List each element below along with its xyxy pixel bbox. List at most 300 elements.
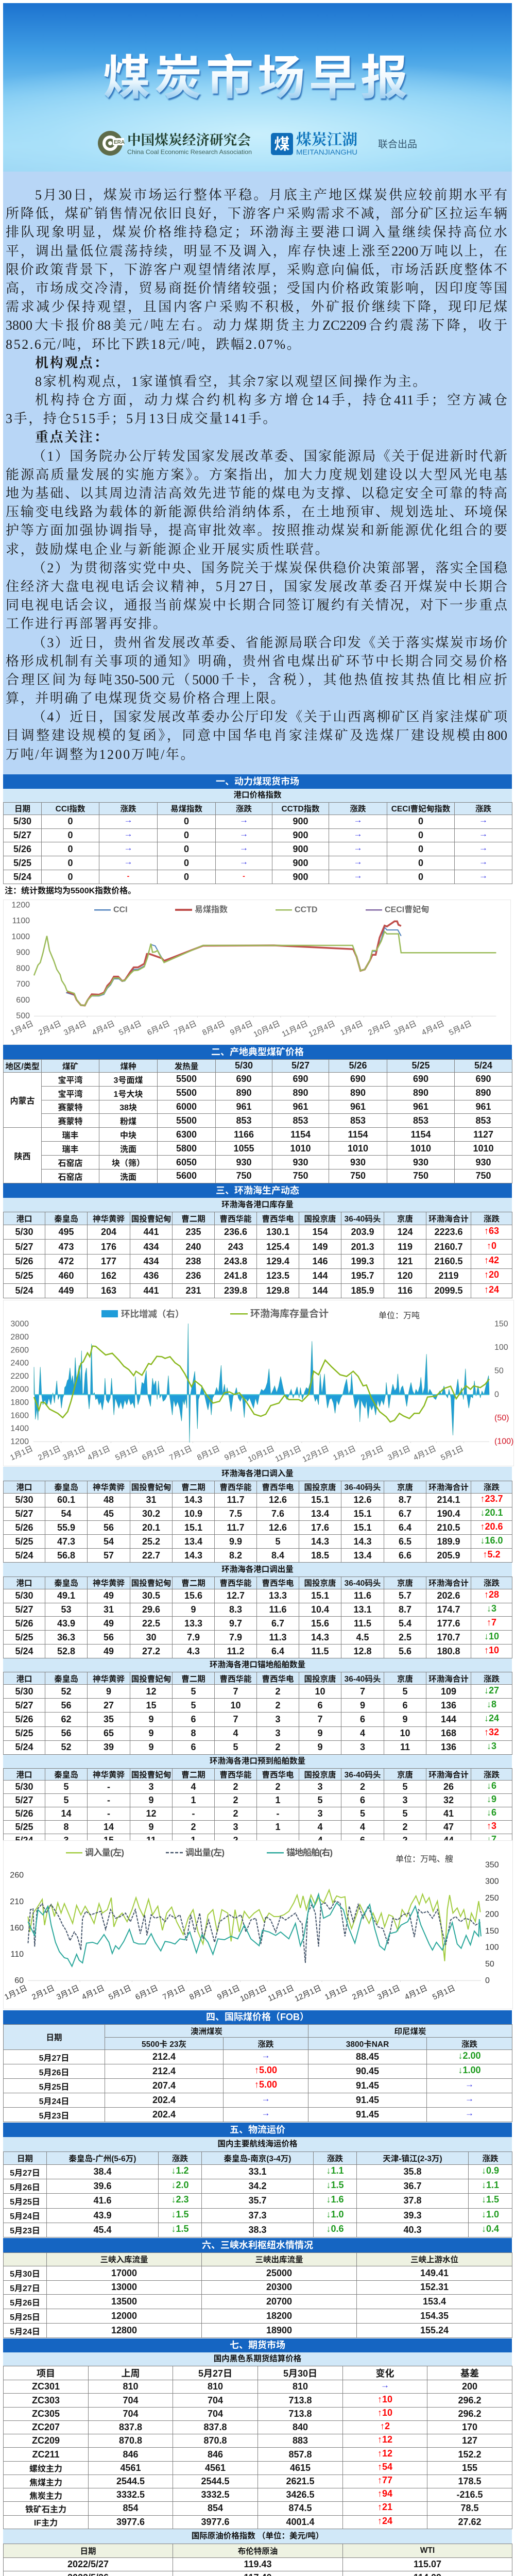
table: port inventory: 163 <box>101 1285 116 1296</box>
y axis labels: 1200 <box>11 901 30 910</box>
x axis labels: 3月4日 <box>62 1019 88 1037</box>
table: anchored ships: 136 <box>441 1742 456 1752</box>
table heading: 国内黑色系期货结算价格 <box>214 2354 301 2363</box>
table: anchored ships: ↓27 <box>484 1685 499 1696</box>
commentary text: 机构持仓方面，动力煤合约机构多方增仓14手，持仓411手；空方减仓 <box>35 393 507 408</box>
table: port price indices: 涨跌 <box>350 805 366 814</box>
table: port inventory: 120 <box>397 1270 413 1281</box>
table: FOB prices: 5月26日 <box>39 2069 69 2077</box>
table: port outflow: 环渤海合计 <box>428 1579 469 1588</box>
panel: section 5 logistics freight <box>3 2123 512 2238</box>
table: port outflow: 涨跌 <box>484 1579 500 1588</box>
table: port outflow: 神华黄骅 <box>93 1579 125 1588</box>
table: port inflow: 54 <box>104 1536 114 1547</box>
left y axis: 1200 <box>10 1437 29 1446</box>
table: port price indices: 900 <box>293 844 308 854</box>
table: expected ships: 1 <box>191 1835 196 1845</box>
legend <box>66 1848 333 1858</box>
left y axis: 160 <box>10 1924 24 1933</box>
right y axis: 50 <box>494 1366 504 1376</box>
table: anchored ships: 39 <box>104 1742 114 1752</box>
left y axis: 1600 <box>10 1411 29 1420</box>
table: port inflow: 47.3 <box>57 1536 75 1547</box>
table: port inflow: 6.7 <box>399 1509 411 1519</box>
y axis labels <box>11 901 30 1020</box>
table: anchored ships: 7 <box>360 1686 365 1697</box>
table: FOB prices: → <box>262 2094 270 2104</box>
table: expected ships: 5/30 <box>15 1782 33 1792</box>
table: port inflow: 9.9 <box>229 1536 242 1547</box>
table: sea freight: 36.7 <box>403 2181 422 2191</box>
section heading <box>3 2238 512 2252</box>
table: port inventory: ↑63 <box>484 1226 499 1236</box>
table: futures settlement: IF主力 <box>34 2519 58 2528</box>
table: FOB prices: 5月27日 <box>39 2054 69 2063</box>
table: port price indices: → <box>479 843 488 853</box>
table: port price indices: 0 <box>184 816 189 826</box>
table: expected ships: ↓6 <box>487 1781 496 1791</box>
table: port inflow: 曹西华能 <box>219 1483 251 1492</box>
x axis labels: 2月4日 <box>37 1019 63 1037</box>
table: port inflow: ↓16.0 <box>480 1535 503 1546</box>
table heading <box>3 1755 512 1768</box>
table: Three Gorges flow and level: 152.31 <box>420 2282 449 2292</box>
left y axis: 2400 <box>10 1359 29 1368</box>
table: anchored ships: 6 <box>360 1714 365 1724</box>
table: crude oil prices: 日期 <box>80 2547 96 2556</box>
table heading: 环渤海各港口预到船舶数量 <box>210 1757 305 1766</box>
x axis labels: 12月1日 <box>301 1444 331 1464</box>
table: anchored ships: 2 <box>275 1742 280 1752</box>
table: expected ships: 2 <box>360 1782 365 1792</box>
table: port inventory: 449 <box>58 1285 74 1296</box>
table: Three Gorges flow and level: 5月25日 <box>10 2313 40 2322</box>
table: mine prices: 陕西 <box>14 1153 31 1161</box>
table: expected ships: 8 <box>63 1822 69 1832</box>
x axis labels: 12月4日 <box>307 1019 337 1039</box>
table: port price indices: 0 <box>67 872 73 882</box>
table: futures settlement: 基差 <box>460 2368 479 2379</box>
table: futures settlement: 857.8 <box>288 2449 312 2460</box>
table: sea freight: 45.4 <box>93 2225 112 2235</box>
table: port inflow: 5/25 <box>15 1536 33 1547</box>
table: expected ships: 港口 <box>16 1771 32 1780</box>
table: expected ships: 3 <box>63 1835 69 1845</box>
table: port outflow: 202.6 <box>437 1590 460 1601</box>
section heading: 一、动力煤现货市场 <box>216 776 299 787</box>
table: Three Gorges flow and level: 20300 <box>266 2282 292 2292</box>
y axis labels: 1000 <box>11 933 30 941</box>
table: port price indices: 0 <box>418 830 423 840</box>
table: anchored ships: 港口 <box>16 1675 32 1684</box>
unit label: 单位：万吨、艘 <box>396 1855 453 1864</box>
table: port price indices: → <box>239 843 248 853</box>
table: port outflow: 43.9 <box>57 1618 75 1629</box>
section heading: 七、期货市场 <box>230 2340 285 2350</box>
x axis labels: 8月1日 <box>188 1984 214 2002</box>
table: port price indices: → <box>239 829 248 839</box>
table: anchored ships: 3 <box>360 1742 365 1752</box>
table: port outflow: 12.8 <box>353 1646 372 1656</box>
table: mine prices: 853 <box>293 1115 308 1126</box>
table: port inflow: 36-40码头 <box>345 1483 381 1492</box>
table: expected ships: ↓7 <box>487 1834 496 1844</box>
panel: section 3 Bohai rim production <box>3 1183 514 2009</box>
table: port inflow: 5 <box>275 1536 280 1547</box>
table: sea freight: ↓1.5 <box>171 2224 189 2234</box>
table: mine prices: 宝平湾 <box>58 1090 82 1099</box>
x axis labels: 9月4日 <box>229 1019 254 1037</box>
table: port outflow: 49 <box>104 1646 114 1656</box>
table: anchored ships: 168 <box>441 1728 456 1738</box>
table: futures settlement: 4561 <box>205 2463 226 2473</box>
table: port outflow: 5.4 <box>399 1618 411 1629</box>
table: port inflow: ↑20.6 <box>480 1521 503 1532</box>
table: anchored ships: 136 <box>441 1700 456 1710</box>
x axis labels: 3月1日 <box>386 1444 412 1462</box>
table: port outflow: 27.2 <box>142 1646 160 1656</box>
table: FOB prices: 91.45 <box>356 2080 379 2091</box>
table: FOB prices: 207.4 <box>152 2080 176 2091</box>
table: mine prices: 1154 <box>290 1129 311 1140</box>
table: FOB prices: ↑5.00 <box>254 2065 277 2075</box>
table: port price indices: → <box>479 857 488 867</box>
panel: section 1 thermal coal spot market <box>3 774 512 1045</box>
table: port inflow: 56.8 <box>57 1550 75 1561</box>
table: port inventory: 144 <box>312 1270 328 1281</box>
x axis labels: 4月1日 <box>80 1984 106 2002</box>
table: mine prices: 750 <box>293 1171 308 1181</box>
table: port inventory: 199.3 <box>351 1256 374 1266</box>
table: port inflow: 6.4 <box>399 1522 411 1533</box>
table: expected ships: 47 <box>443 1822 454 1832</box>
table: port inventory: 434 <box>143 1256 159 1266</box>
table: port inflow: 港口 <box>16 1483 32 1492</box>
table: anchored ships: 涨跌 <box>484 1675 500 1684</box>
table: futures settlement: 变化 <box>376 2368 394 2379</box>
table: anchored ships: 9 <box>317 1728 322 1738</box>
table: port outflow: 53 <box>61 1604 72 1615</box>
table: mine prices: 38块 <box>119 1104 137 1112</box>
table: port outflow: 36-40码头 <box>345 1579 381 1588</box>
table: port inflow: 8.4 <box>271 1550 284 1561</box>
table: port outflow: 5/30 <box>15 1590 33 1601</box>
table: mine prices: 煤矿 <box>62 1062 78 1071</box>
legend: 调入量(左) <box>85 1848 124 1858</box>
table: port outflow: 4.5 <box>356 1632 369 1642</box>
table: port inventory: 国投京唐 <box>304 1215 336 1224</box>
table: port inventory: 204 <box>101 1227 116 1237</box>
table: Three Gorges flow and level: 5月30日 <box>10 2270 40 2279</box>
table: port outflow: 港口 <box>16 1579 32 1588</box>
x axis labels: 7月1日 <box>168 1444 194 1462</box>
table heading: 国内主要航线海运价格 <box>217 2140 298 2148</box>
commentary text: 住经济大盘电视电话会议精神，5月27日，国家发展改革委召开煤炭中长期合 <box>6 579 507 594</box>
table: futures settlement: ↑54 <box>377 2462 392 2472</box>
table: sea freight: 37.3 <box>248 2210 267 2221</box>
table: expected ships: 环渤海合计 <box>428 1771 469 1780</box>
table: futures settlement: 127 <box>462 2435 477 2446</box>
x axis labels <box>3 1984 457 2004</box>
table: futures settlement: 2544.5 <box>116 2476 145 2486</box>
right y axis: 300 <box>485 1877 499 1886</box>
legend: 易煤指数 <box>195 905 228 914</box>
table: port price indices: → <box>124 829 133 839</box>
table: anchored ships: 5/30 <box>15 1686 33 1697</box>
table: port inflow: 曹西华电 <box>262 1483 294 1492</box>
table: port inflow: 11.7 <box>227 1495 245 1505</box>
table: port inventory: 144 <box>312 1285 328 1296</box>
table: anchored ships: 5/25 <box>15 1728 33 1738</box>
table: expected ships: 1 <box>275 1795 280 1805</box>
x axis labels: 1月1日 <box>9 1444 35 1462</box>
table: port inflow: 15.1 <box>311 1495 329 1505</box>
table: mine prices: 5500 <box>176 1088 197 1098</box>
left y axis: 3000 <box>10 1320 29 1328</box>
x axis labels: 8月1日 <box>196 1444 221 1462</box>
table: expected ships: 15 <box>104 1835 114 1845</box>
table: mine prices: 690 <box>293 1074 308 1084</box>
table: futures settlement: ↑10 <box>377 2394 392 2404</box>
table: mine prices: 853 <box>236 1115 252 1126</box>
table: port outflow: 9.7 <box>229 1618 242 1629</box>
table: anchored ships: 6 <box>191 1714 196 1724</box>
table: mine prices: 5/26 <box>349 1060 367 1071</box>
table: sea freight: 35.8 <box>403 2166 422 2177</box>
table heading <box>3 2137 512 2151</box>
table: futures settlement: ZC301 <box>32 2381 60 2392</box>
y axis labels: 900 <box>16 948 30 957</box>
x axis labels: 5月4日 <box>117 1019 143 1037</box>
table: expected ships: 32 <box>443 1795 454 1805</box>
commentary text: （2）为贯彻落实党中央、国务院关于煤炭保供稳价决策部署，落实全国稳 <box>32 561 507 575</box>
table: expected ships: 2 <box>233 1808 238 1819</box>
y axis labels: 500 <box>16 1012 30 1020</box>
table: port price indices: 0 <box>418 872 423 882</box>
table: anchored ships: 环渤海合计 <box>428 1675 469 1684</box>
title: 煤炭市场早报 <box>103 40 412 108</box>
table: port inventory: 495 <box>58 1227 74 1237</box>
table: port inventory: 441 <box>143 1227 159 1237</box>
table: mine prices: 930 <box>413 1157 428 1167</box>
CCERA name: 中国煤炭经济研究会 <box>127 129 251 149</box>
table: anchored ships: 62 <box>61 1714 72 1724</box>
table: Three Gorges flow and level: 三峡入库流量 <box>100 2256 148 2264</box>
y axis labels: 1100 <box>12 917 30 925</box>
table: expected ships: 2 <box>402 1835 408 1845</box>
table: FOB prices: ↑5.00 <box>254 2079 277 2090</box>
table: port price indices: 0 <box>418 858 423 868</box>
table: port price indices: → <box>353 871 363 880</box>
x axis labels: 1月1日 <box>332 1444 357 1462</box>
commentary text: 852.6元/吨，环比下跌18元/吨，跌幅2.07%。 <box>6 337 301 351</box>
table: FOB prices: 88.45 <box>356 2052 379 2062</box>
table: anchored ships: 27 <box>104 1700 114 1710</box>
line chart: price index history <box>3 900 511 1045</box>
x axis labels: 4月1日 <box>412 1444 438 1462</box>
table: sea freight: ↓2.0 <box>171 2180 189 2190</box>
table: port inventory: 203.9 <box>351 1227 374 1237</box>
table: mine prices: 6050 <box>176 1157 197 1167</box>
table: anchored ships: ↓8 <box>487 1699 496 1709</box>
table: port inflow: 涨跌 <box>484 1483 500 1492</box>
table: anchored ships: 52 <box>61 1742 72 1752</box>
table: expected ships: 3 <box>148 1782 153 1792</box>
section heading: 三、环渤海生产动态 <box>216 1185 299 1196</box>
table: futures settlement: 713.8 <box>288 2409 312 2419</box>
co-produced label: 联合出品 <box>378 137 417 150</box>
table: mine prices: 瑞丰 <box>62 1145 78 1154</box>
table: anchored ships: 6 <box>317 1700 322 1710</box>
table: expected ships: 京唐 <box>397 1771 413 1780</box>
table: port inflow: 10.9 <box>184 1509 202 1519</box>
x axis labels: 5月1日 <box>439 1444 465 1462</box>
table: futures settlement: 296.2 <box>458 2395 482 2405</box>
table: mine prices: 1154 <box>410 1129 431 1140</box>
table heading: 环渤海各港口库存量 <box>221 1200 294 1209</box>
x axis labels: 7月4日 <box>173 1019 198 1037</box>
table: port outflow: 7.9 <box>187 1632 200 1642</box>
x axis labels: 11月1日 <box>274 1444 303 1464</box>
table: futures settlement: 3977.6 <box>201 2517 230 2527</box>
table: FOB prices: 202.4 <box>152 2109 176 2120</box>
table: port outflow: 36.3 <box>57 1632 75 1642</box>
combo chart: inventory total and daily change <box>3 1300 514 1466</box>
table: crude oil prices: 119.43 <box>244 2559 272 2569</box>
table: Three Gorges flow and level: 18200 <box>266 2311 292 2321</box>
table: port price indices: - <box>127 872 129 880</box>
table: port inflow: 国投曹妃甸 <box>131 1483 171 1492</box>
table: futures settlement: 713.8 <box>288 2395 312 2405</box>
table: port inventory: 36-40码头 <box>345 1215 381 1224</box>
table: port outflow: 5.6 <box>399 1646 411 1656</box>
table: expected ships: 5 <box>402 1782 408 1792</box>
x axis labels: 11月4日 <box>281 1019 310 1039</box>
table: port inflow: 11.7 <box>227 1522 245 1533</box>
table: port inflow: 5/26 <box>15 1522 33 1533</box>
table: sea freight: 秦皇岛-南京(3-4万) <box>224 2155 291 2163</box>
table: expected ships: 2 <box>275 1782 280 1792</box>
commentary text: 3800大卡报价88美元/吨左右。动力煤期货主力ZC2209合约震荡下降，收于 <box>6 318 507 333</box>
table: futures settlement: 704 <box>208 2409 223 2419</box>
table: port inventory: 5/30 <box>15 1227 33 1237</box>
table: port inventory: 154 <box>312 1227 328 1237</box>
table: port inflow: 48 <box>104 1495 114 1505</box>
table: sea freight: 5月24日 <box>10 2212 40 2221</box>
table: anchored ships: 2 <box>275 1700 280 1710</box>
table: sea freight: ↓1.1 <box>482 2180 499 2190</box>
table: port inventory: 436 <box>143 1270 159 1281</box>
table: futures settlement: 200 <box>462 2381 477 2392</box>
table: mine prices: 890 <box>413 1088 428 1098</box>
table: anchored ships: 56 <box>61 1728 72 1738</box>
CCERA name: China Coal Economic Research Association <box>127 148 252 156</box>
table: futures settlement: 上周 <box>122 2368 140 2379</box>
table: Three Gorges flow and level: 三峡上游水位 <box>410 2256 458 2264</box>
table: futures settlement: 2621.5 <box>286 2476 315 2486</box>
table: port inventory: 236 <box>185 1270 201 1281</box>
left y axis: 2200 <box>10 1372 29 1381</box>
table: futures settlement: 870.8 <box>203 2435 227 2446</box>
table: port inventory: ↑0 <box>487 1241 496 1251</box>
table: futures settlement: 837.8 <box>119 2422 142 2432</box>
commentary text: 限价政策背景下，下游客户观望情绪浓厚，采购意向偏低，市场活跃度整体不 <box>6 262 507 277</box>
table: mine prices: 5/30 <box>235 1060 253 1071</box>
table: anchored ships: 3 <box>275 1728 280 1738</box>
table: futures settlement: 3332.5 <box>201 2489 230 2500</box>
commentary text: 同电视电话会议，通报当前煤炭中长期合同签订履约有关情况，对下一步重点 <box>6 598 507 613</box>
table: port outflow: 11.6 <box>269 1604 287 1615</box>
table: futures settlement: 焦炭主力 <box>29 2492 62 2501</box>
table: port inflow: 13.4 <box>353 1550 372 1561</box>
table: expected ships: - <box>192 1808 195 1819</box>
table: crude oil prices: 布伦特原油 <box>238 2547 278 2556</box>
section heading <box>3 1183 512 1198</box>
section heading: 六、三峡水利枢纽水情情况 <box>202 2240 313 2250</box>
commentary text: 3手，持仓515手；5月13日成交量141手。 <box>6 411 278 426</box>
table: port price indices: 0 <box>184 872 189 882</box>
table: mine prices: 5500 <box>176 1074 197 1084</box>
table: crude oil prices: 115.07 <box>414 2559 441 2569</box>
table: port outflow: 31 <box>104 1604 114 1615</box>
table: port outflow: 5.7 <box>399 1590 411 1601</box>
table: mine prices: 6300 <box>176 1129 197 1140</box>
table: Three Gorges flow and level: 149.41 <box>420 2268 449 2278</box>
table: Three Gorges flow and level: 5月27日 <box>10 2284 40 2293</box>
table: expected ships: 6 <box>360 1835 365 1845</box>
x axis labels: 2月1日 <box>30 1984 56 2002</box>
x axis labels: 12月1日 <box>294 1984 323 2004</box>
table: sea freight: 涨跌 <box>327 2155 343 2163</box>
table: port inventory: 243 <box>228 1242 244 1252</box>
table: expected ships: 1 <box>191 1795 196 1805</box>
table: FOB prices: 212.4 <box>152 2066 176 2076</box>
table: futures settlement: ↑94 <box>377 2488 392 2499</box>
table: Three Gorges flow and level: 155.24 <box>420 2325 449 2335</box>
table: futures settlement: 3977.6 <box>116 2517 145 2527</box>
table: expected ships: ↓9 <box>487 1794 496 1804</box>
table: expected ships: 国投曹妃甸 <box>131 1771 171 1780</box>
table: mine prices: 890 <box>350 1088 366 1098</box>
table: port outflow: 56 <box>104 1632 114 1642</box>
commentary text: 压输变电线路为载体的新能源供给消纳体系，在土地预审、规划选址、环境保 <box>6 504 507 519</box>
table: futures settlement: 704 <box>123 2395 139 2405</box>
table: mine prices: 1055 <box>233 1143 254 1154</box>
table: anchored ships: 5 <box>402 1686 408 1697</box>
table: port inflow: 55.9 <box>57 1522 75 1533</box>
table: anchored ships: 国投京唐 <box>304 1675 336 1684</box>
table: mine prices: 750 <box>475 1171 491 1181</box>
table: anchored ships: 109 <box>441 1686 456 1697</box>
table: port outflow: 5/27 <box>15 1604 33 1615</box>
right y axis: 350 <box>485 1861 499 1869</box>
panel: section 6 Three Gorges water <box>3 2238 512 2338</box>
table: FOB prices: 5月24日 <box>39 2097 69 2106</box>
y axis labels: 700 <box>16 980 30 989</box>
table: anchored ships: 2 <box>275 1686 280 1697</box>
table: port inflow: 7.5 <box>229 1509 242 1519</box>
table: mine prices: 赛蒙特 <box>58 1117 82 1126</box>
y axis labels: 600 <box>16 996 30 1005</box>
table: port outflow: 170.7 <box>437 1632 460 1642</box>
table: port outflow: 曹二期 <box>181 1579 205 1588</box>
table: port outflow: 曹西华能 <box>219 1579 251 1588</box>
table: expected ships: 2 <box>233 1795 238 1805</box>
x axis labels: 3月1日 <box>55 1984 81 2002</box>
table: anchored ships: 曹西华能 <box>219 1675 251 1684</box>
table: mine prices: 750 <box>350 1171 366 1181</box>
table: port inflow: 22.7 <box>142 1550 160 1561</box>
